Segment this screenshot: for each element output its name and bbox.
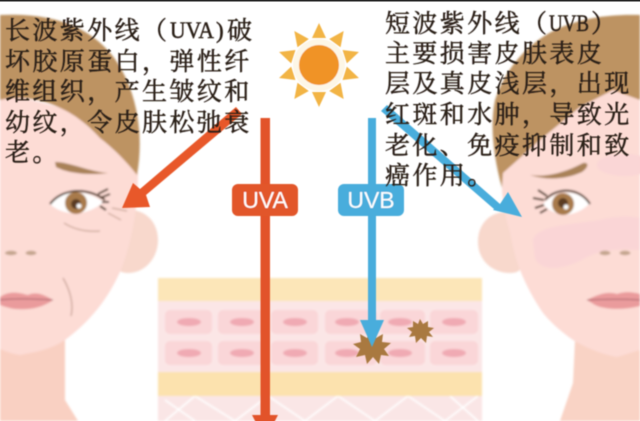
right neck bbox=[560, 340, 640, 421]
left face skin bbox=[0, 97, 138, 355]
right nostrils bbox=[600, 251, 630, 255]
skin cells top row bbox=[165, 310, 478, 334]
skin cells bottom row bbox=[165, 341, 478, 365]
left neck bbox=[0, 340, 78, 421]
damage spots bbox=[353, 319, 434, 364]
UVB description text: UVB bbox=[549, 11, 589, 36]
UVA description text: 维组织，产生皱纹和 bbox=[5, 78, 252, 106]
right hair bbox=[493, 15, 640, 188]
UVA description text: ) bbox=[216, 18, 224, 43]
upper yellow layer bbox=[158, 278, 482, 301]
right lips bbox=[587, 292, 640, 309]
UVB label bbox=[338, 184, 404, 216]
UVB label: UVB bbox=[347, 187, 395, 213]
right ear bbox=[478, 212, 521, 273]
UVA description text: 坏胶原蛋白，弹性纤 bbox=[5, 48, 252, 76]
left hair bbox=[0, 15, 140, 175]
left eye bbox=[50, 189, 110, 214]
right face with sun damage bbox=[478, 15, 640, 421]
UVB description text: 层及真皮浅层，出现 bbox=[385, 70, 632, 98]
right eye bbox=[533, 190, 590, 215]
UVB description text: 癌作用。 bbox=[385, 162, 495, 190]
UVA description text: 幼纹，令皮肤松弛衰 bbox=[5, 109, 252, 137]
UVB description text: ） bbox=[591, 10, 618, 38]
cheek blush bbox=[533, 217, 640, 268]
UVB description text: 主要损害皮肤表皮 bbox=[385, 40, 604, 68]
left eye wrinkles bbox=[64, 208, 127, 231]
left ear bbox=[117, 210, 158, 273]
UVA vertical arrow bbox=[252, 118, 278, 421]
UVB vertical arrow bbox=[360, 118, 384, 347]
skin cross-section diagram bbox=[158, 278, 482, 421]
forehead blush bbox=[597, 154, 640, 176]
sun icon bbox=[277, 23, 361, 107]
UVB description text: 红斑和水肿，导致光 bbox=[385, 101, 632, 129]
dermis collagen mesh bbox=[158, 396, 482, 421]
UVA label bbox=[232, 184, 298, 216]
UVB diagonal arrow to right face bbox=[381, 105, 522, 217]
UVA description text: 老。 bbox=[5, 139, 60, 167]
UVA label: UVA bbox=[242, 187, 288, 213]
right eyebrow bbox=[530, 163, 587, 178]
left nostrils bbox=[5, 251, 36, 255]
UVA description text: UVA bbox=[170, 18, 214, 43]
UVA diagonal arrow to left face bbox=[122, 107, 242, 208]
UVB description text: 短波紫外线 bbox=[385, 10, 522, 38]
right face skin bbox=[502, 90, 640, 357]
UVA description text: （ bbox=[142, 17, 169, 45]
cell nuclei bbox=[177, 318, 466, 357]
left eyebrow bbox=[55, 162, 108, 174]
lower yellow layer bbox=[158, 372, 482, 396]
sun rays bbox=[277, 23, 361, 107]
left face with wrinkles bbox=[0, 15, 158, 421]
UVA description text: 长波紫外线 bbox=[5, 17, 142, 45]
UVB description text: （ bbox=[522, 10, 549, 38]
left smile line bbox=[63, 278, 72, 316]
UVA description text: 破 bbox=[227, 17, 254, 45]
left lips bbox=[0, 293, 53, 309]
UVB description text: 老化、免疫抑制和致 bbox=[385, 132, 632, 160]
epidermis band bbox=[158, 301, 482, 372]
